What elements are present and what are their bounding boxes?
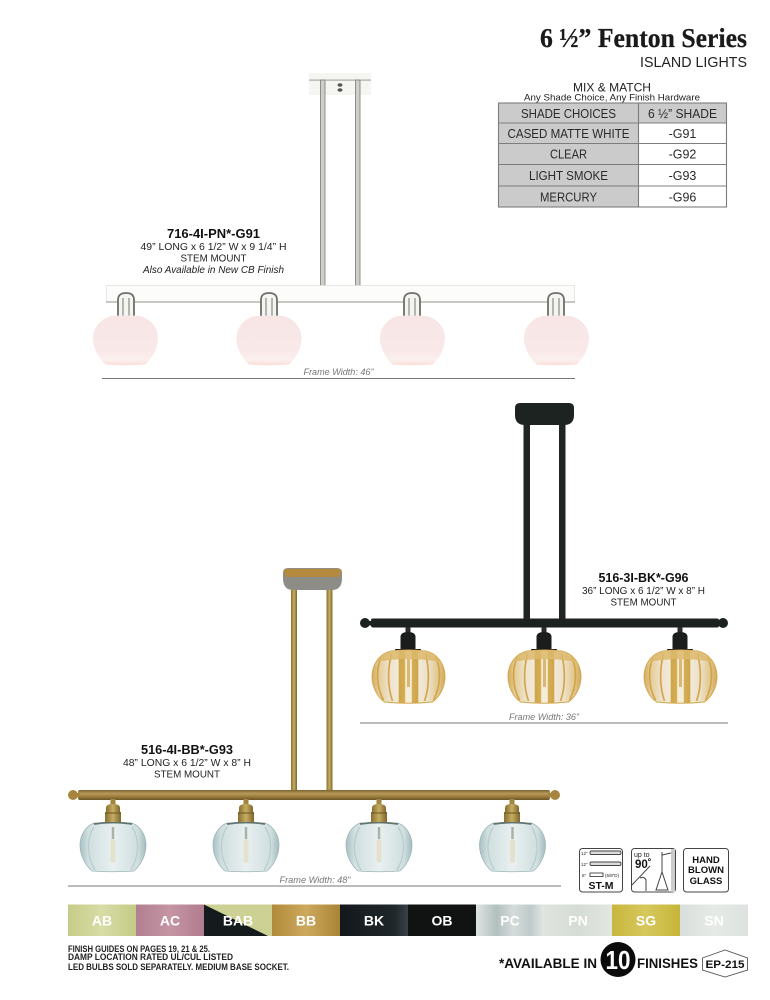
label: 516-3I-BK <box>582 571 705 608</box>
finish swatches <box>68 904 748 936</box>
icon: hand blown glass: GLASS <box>690 876 722 887</box>
swatch: oil rubbed bronze <box>408 904 476 936</box>
shade choices table: -G93 <box>669 169 696 183</box>
icon: slope up to 90 degrees: up to <box>634 852 650 859</box>
shade choices table: SHADE CHOICES <box>521 107 616 121</box>
label: 716-4I-PN <box>140 227 286 276</box>
fixture: polished nickel white island light <box>93 73 589 365</box>
frame width 48: Frame Width: 48” <box>280 875 352 885</box>
swatch: black antique brass <box>204 904 272 936</box>
icon: stem mount: (5/8”D) <box>605 873 620 878</box>
fixture: brushed brass island light with clear shades <box>68 568 560 872</box>
swatch: brushed brass: BB <box>296 912 316 928</box>
swatch: brushed brass <box>272 904 340 936</box>
icon: slope up to 90 degrees <box>632 848 676 892</box>
shade choices table: MERCURY <box>540 190 598 204</box>
label: 516-4I-BB: 516-4I-BB*-G93 <box>141 743 233 757</box>
swatch: oil rubbed bronze: OB <box>432 912 452 928</box>
label: 716-4I-PN: 716-4I-PN*-G91 <box>167 227 260 241</box>
label: 516-4I-BB: 48” LONG x 6 1/2” W x 8” H <box>123 757 251 769</box>
icon: stem mount: ST-M <box>588 880 614 892</box>
icon: stem mount: 12” <box>581 851 588 856</box>
icon: stem mount <box>580 848 622 892</box>
frame width 36: Frame Width: 36” <box>509 712 580 722</box>
swatch: antique copper: AC <box>160 912 180 928</box>
swatch: polished chrome <box>476 904 544 936</box>
shade choices table: -G91 <box>669 127 696 141</box>
footnotes: FINISH GUIDES ON PAGES 19, 21 & 25. <box>68 944 210 954</box>
label: 716-4I-PN: 49” LONG x 6 1/2” W x 9 1/4” H <box>140 241 286 253</box>
icon: hand blown glass <box>684 848 728 892</box>
badge: EP-215: EP-215 <box>706 959 744 971</box>
swatch: black antique brass: BAB <box>223 912 253 928</box>
shade choices table: 6 ½” SHADE <box>648 107 717 121</box>
shade choices table: -G96 <box>669 190 696 204</box>
mix and match heading: MIX & MATCH <box>573 80 651 94</box>
icon: hand blown glass: HAND <box>692 855 720 866</box>
footnotes: DAMP LOCATION RATED UL/CUL LISTED <box>68 952 233 962</box>
footnotes <box>68 944 289 972</box>
label: 516-3I-BK: 516-3I-BK*-G96 <box>598 571 689 585</box>
swatch: matte black <box>340 904 408 936</box>
swatch: polished nickel: PN <box>568 912 588 928</box>
available in 10 finishes <box>499 942 698 977</box>
available in 10 finishes: *AVAILABLE IN <box>499 956 597 971</box>
swatch: satin gold: SG <box>636 912 656 928</box>
swatch: polished nickel <box>544 904 612 936</box>
shade choices table: CASED MATTE WHITE <box>508 127 630 141</box>
label: 516-4I-BB <box>123 743 251 780</box>
shade choices table: -G92 <box>669 148 696 162</box>
swatch: antique copper <box>136 904 204 936</box>
swatch: satin nickel <box>680 904 748 936</box>
mix and match heading: Any Shade Choice, Any Finish Hardware <box>524 92 700 104</box>
shade choices table <box>498 103 726 207</box>
footnotes: LED BULBS SOLD SEPARATELY. MEDIUM BASE SOCKET. <box>68 962 289 972</box>
swatch: matte black: BK <box>364 912 384 928</box>
label: 516-3I-BK: STEM MOUNT <box>610 596 677 608</box>
swatch: satin nickel: SN <box>704 912 724 928</box>
available in 10 finishes: 10 <box>606 945 630 975</box>
badge: EP-215 <box>702 950 748 977</box>
label: 716-4I-PN: Also Available in New CB Finish <box>142 265 284 276</box>
mix and match heading <box>524 80 700 104</box>
label: 516-4I-BB: STEM MOUNT <box>154 768 221 780</box>
fixture: black island light with mercury shades <box>360 403 728 703</box>
label: 716-4I-PN: STEM MOUNT <box>180 252 247 264</box>
icon: stem mount: 12” <box>581 862 588 867</box>
shade choices table: LIGHT SMOKE <box>529 169 608 183</box>
frame width 46: Frame Width: 46” <box>304 367 374 377</box>
swatch: antique brass <box>68 904 136 936</box>
swatch: polished chrome: PC <box>500 912 520 928</box>
available in 10 finishes: FINISHES <box>637 956 698 971</box>
icon: slope up to 90 degrees: 90˚ <box>635 859 652 871</box>
subtitle: island lights: ISLAND LIGHTS <box>640 55 747 71</box>
swatch: antique brass: AB <box>92 912 112 928</box>
swatch: satin gold <box>612 904 680 936</box>
icon: stem mount: 6” <box>582 873 587 878</box>
icon: hand blown glass: BLOWN <box>688 865 724 876</box>
shade choices table: CLEAR <box>550 148 587 162</box>
label: 516-3I-BK: 36” LONG x 6 1/2” W x 8” H <box>582 585 705 597</box>
title: 6 ½” Fenton Series <box>540 23 747 53</box>
